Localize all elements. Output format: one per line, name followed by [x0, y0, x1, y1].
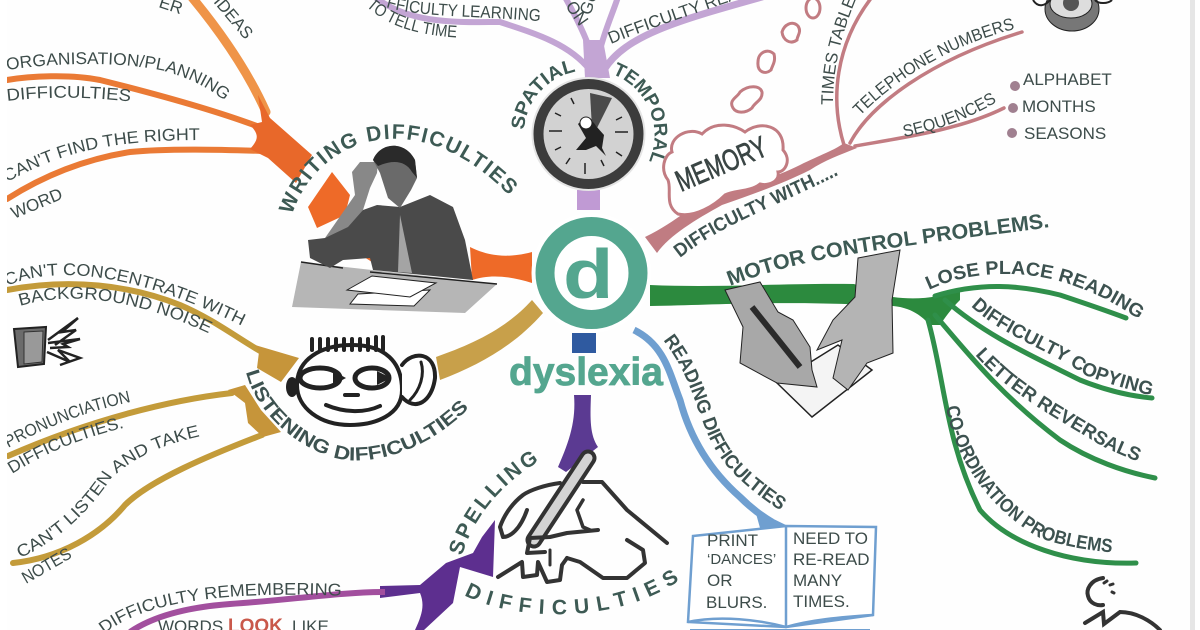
memory labels: TELEPHONE NUMBERS: [852, 18, 1014, 114]
icon: telephone: [1033, 0, 1112, 31]
writing difficulties branch: [7, 0, 532, 283]
central d logo: d: [563, 236, 613, 314]
cloud: memory: [664, 125, 787, 215]
illustration: hands writing: [725, 250, 900, 417]
sequence list: [1007, 70, 1112, 143]
writing difficulties heading: WRITING DIFFICULTIES: [278, 124, 517, 212]
motor control branch: [650, 284, 1155, 563]
central d logo: [532, 213, 652, 333]
listening sub-labels: [7, 263, 246, 584]
page margins: [0, 0, 7, 630]
book: reading difficulties: ‘DANCES’: [707, 551, 776, 568]
sequence list: ALPHABET: [1023, 70, 1112, 89]
listening difficulties branch: [7, 284, 543, 563]
sequence list: MONTHS: [1022, 97, 1096, 116]
illustration: hand holding pen: [498, 458, 667, 582]
listening sub-labels: NOTES: [21, 548, 71, 584]
listening difficulties heading: LISTENING DIFFICULTIES: [246, 369, 467, 460]
spelling difficulties branch: [130, 395, 598, 630]
memory branch: [645, 0, 1022, 253]
listening sub-labels: PRONUNCIATION: [7, 390, 130, 448]
motor labels: LETTER REVERSALS: [976, 347, 1141, 460]
listening sub-labels: DIFFICULTIES.: [7, 418, 123, 474]
book: reading difficulties: PRINT: [707, 531, 758, 550]
listening sub-labels: BACKGROUND NOISE: [18, 286, 213, 333]
book: reading difficulties: [688, 526, 876, 630]
listening sub-labels: CAN'T LISTEN AND TAKE: [18, 425, 200, 556]
memory labels: [672, 0, 1014, 258]
spatial temporal labels: SPATIAL: [512, 61, 576, 129]
dyslexia title: dyslexia: [509, 351, 663, 394]
writing sub-labels: [7, 0, 252, 218]
writing sub-labels: CAN'T FIND THE RIGHT: [7, 128, 200, 180]
book: reading difficulties: TIMES.: [793, 592, 850, 611]
writing sub-labels: WORD: [10, 190, 62, 218]
spelling labels: DIFFICULTIES: [465, 570, 678, 614]
writing sub-labels: DIFFICULTIES: [7, 86, 130, 102]
icon: clock with running man: [532, 77, 646, 191]
spelling labels: [98, 452, 678, 630]
book: reading difficulties: MANY: [793, 571, 842, 590]
writing sub-labels: ORGANISATION/PLANNING: [7, 52, 229, 98]
motor labels: CO-ORDINATION PROBLEMS: [946, 406, 1112, 552]
book: reading difficulties: RE-READ: [793, 550, 870, 569]
book: reading difficulties: BLURS.: [706, 593, 767, 612]
reading difficulties heading: READING DIFFICULTIES: [664, 334, 786, 509]
sequence list: SEASONS: [1024, 124, 1106, 143]
spatial temporal branch: [375, 0, 762, 210]
spelling labels: SPELLING: [450, 452, 537, 554]
motor control heading: MOTOR CONTROL PROBLEMS.: [726, 214, 1048, 286]
memory labels: DIFFICULTY WITH.....: [672, 172, 838, 258]
cloud: memory: MEMORY: [671, 131, 772, 198]
illustration: man at desk: [292, 146, 497, 313]
illustration: small figure corner: [1085, 578, 1160, 630]
connector square: [572, 333, 596, 353]
icon: speaker with noise: [14, 318, 80, 367]
spatial temporal labels: TEMPORAL: [616, 62, 668, 162]
memory labels: SEQUENCES: [903, 93, 996, 136]
motor labels: LOSE PLACE READING: [924, 260, 1144, 317]
spatial temporal labels: [369, 0, 731, 162]
illustration: face with big ear: [286, 337, 435, 425]
listening sub-labels: CAN'T CONCENTRATE WITH: [7, 263, 246, 326]
reading difficulties branch: [634, 330, 790, 528]
motor labels: [924, 260, 1152, 552]
motor labels: DIFFICULTY COPYING: [972, 297, 1152, 394]
thought clouds: [732, 0, 820, 112]
book: reading difficulties: OR: [707, 571, 732, 590]
book: reading difficulties: NEED TO: [793, 529, 868, 548]
